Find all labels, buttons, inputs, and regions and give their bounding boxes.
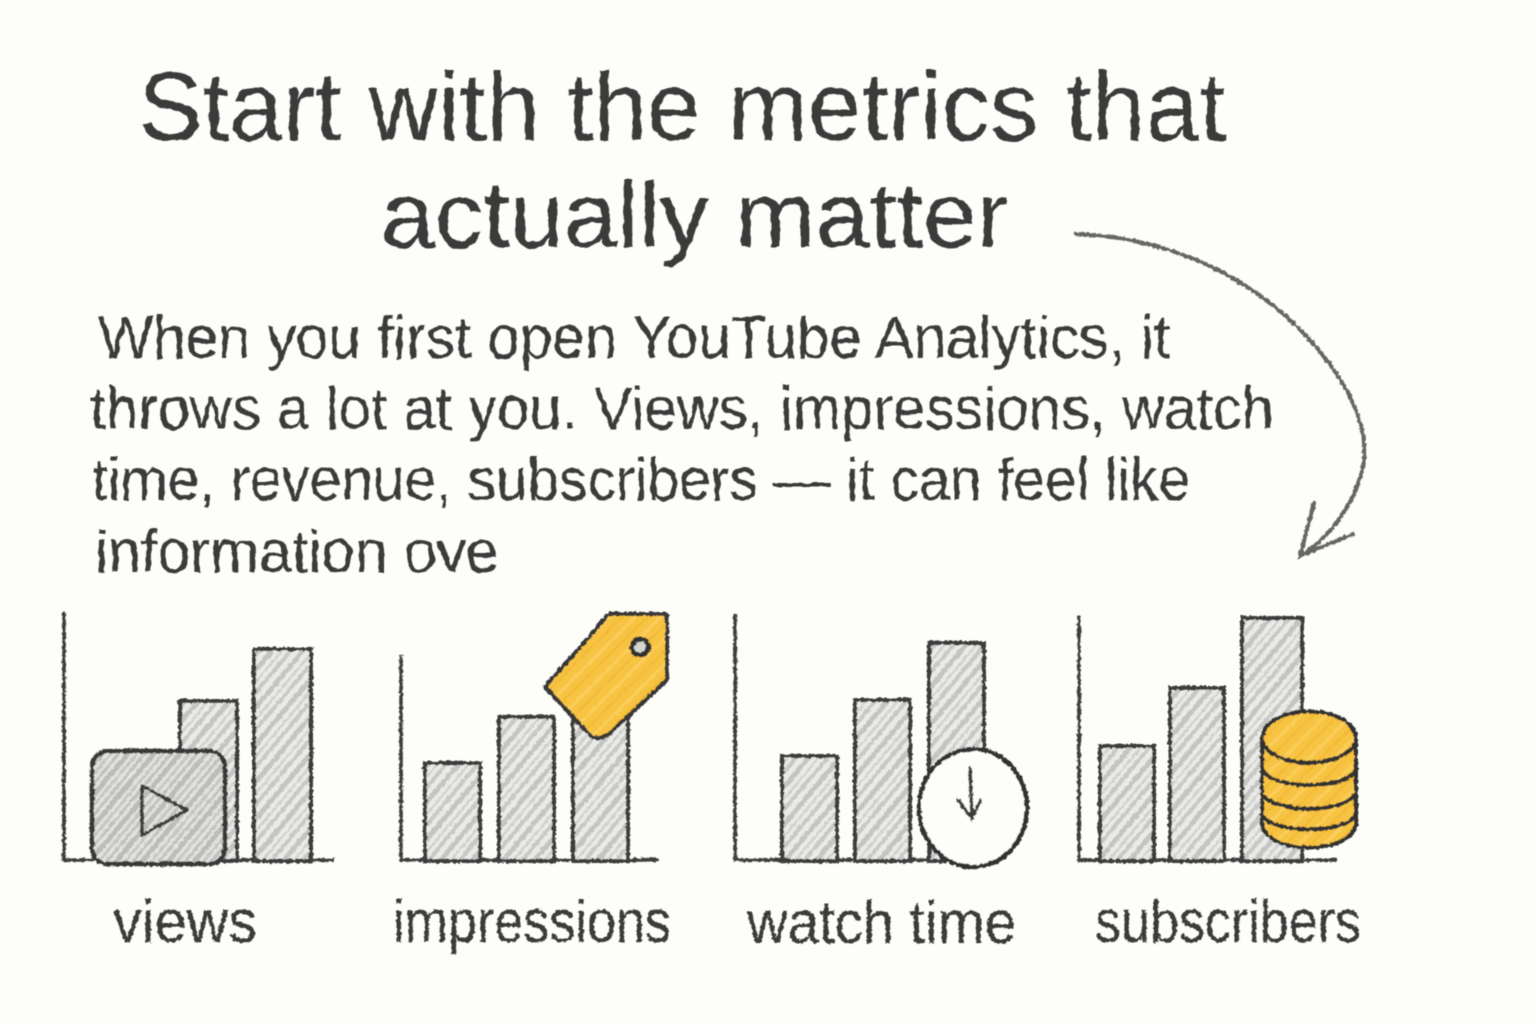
body text: When you first open YouTube Analytics, it: [98, 304, 1170, 371]
label: views: [113, 888, 257, 955]
title: actually matter: [381, 163, 1009, 267]
panel: subscribers: [1079, 617, 1361, 955]
panel: watch time: [735, 616, 1027, 956]
bars: [180, 649, 311, 861]
body text: throws a lot at you. Views, impressions, watch: [90, 375, 1274, 442]
label: impressions: [393, 888, 671, 955]
axes: [1079, 617, 1335, 860]
arrow: title to subscribers chart: [1076, 234, 1364, 556]
icon: clock: [919, 749, 1027, 867]
label: subscribers: [1095, 888, 1361, 955]
body text: information ove: [95, 518, 499, 585]
icon: coin stack: [1262, 712, 1356, 848]
label: watch time: [746, 889, 1016, 956]
bars: [782, 643, 984, 861]
bars: [1100, 618, 1302, 861]
title: Start with the metrics that: [138, 52, 1226, 161]
body text: time, revenue, subscribers — it can feel like: [92, 446, 1190, 513]
title: [138, 52, 1226, 267]
panel: impressions: [393, 614, 671, 955]
axes: [64, 613, 333, 860]
axes: [401, 657, 657, 860]
axes: [735, 616, 985, 860]
bars: [425, 700, 628, 861]
icon: price tag: [545, 614, 667, 738]
panel: views: [64, 613, 333, 955]
icon: video play button: [92, 751, 225, 864]
body text: [90, 304, 1274, 585]
